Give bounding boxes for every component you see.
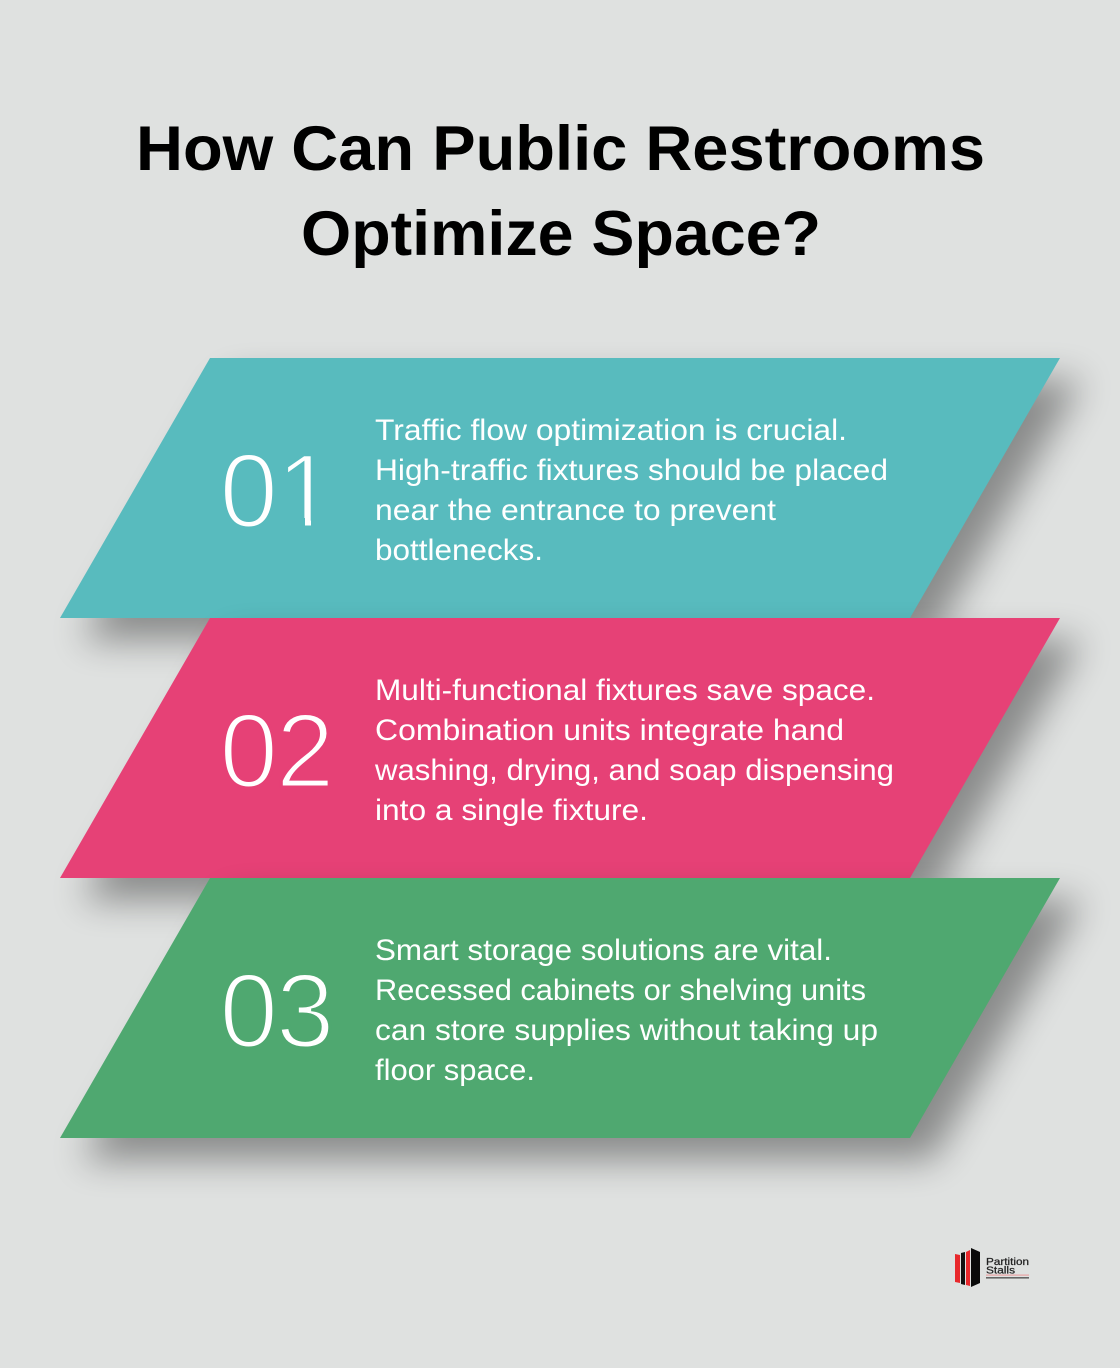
number 01: 01 <box>220 433 335 550</box>
title: How Can Public Restrooms <box>136 114 985 184</box>
text block: step 01: High-traffic fixtures should be placed <box>375 454 888 487</box>
panel: step 02 <box>60 618 1082 900</box>
text block: step 03: floor space. <box>375 1054 535 1087</box>
text block: step 02 <box>374 674 894 827</box>
panel: step 01 <box>60 358 1082 640</box>
logo wordmark: Partition <box>986 1257 1029 1268</box>
logo wordmark: Stalls <box>986 1266 1015 1276</box>
text block: step 03 <box>375 934 878 1087</box>
text block: step 02: into a single fixture. <box>375 794 648 827</box>
text block: step 01: Traffic flow optimization is crucial. <box>375 414 847 447</box>
text block: step 03: Smart storage solutions are vital. <box>375 934 832 967</box>
text block: step 01: bottlenecks. <box>375 534 543 567</box>
text block: step 01 <box>375 414 888 567</box>
title: Optimize Space? <box>301 199 821 269</box>
text block: step 03: Recessed cabinets or shelving units <box>375 974 866 1007</box>
panel: step 03 <box>60 878 1082 1160</box>
number 03: 03 <box>220 953 334 1070</box>
text block: step 03: can store supplies without taking up <box>375 1014 878 1047</box>
logo wordmark <box>986 1257 1029 1279</box>
panel shape: pink <box>60 618 1060 878</box>
number 02: 02 <box>220 693 334 810</box>
text block: step 01: near the entrance to prevent <box>375 494 777 527</box>
panel shape: teal <box>60 358 1060 618</box>
title <box>136 114 985 269</box>
text block: step 02: washing, drying, and soap dispensing <box>374 754 894 787</box>
text block: step 02: Multi-functional fixtures save space. <box>375 674 875 707</box>
panel shape: green <box>60 878 1060 1138</box>
icon: partition stalls <box>955 1248 980 1287</box>
text block: step 02: Combination units integrate hand <box>375 714 844 747</box>
logo: Partition Stalls <box>955 1248 1029 1287</box>
